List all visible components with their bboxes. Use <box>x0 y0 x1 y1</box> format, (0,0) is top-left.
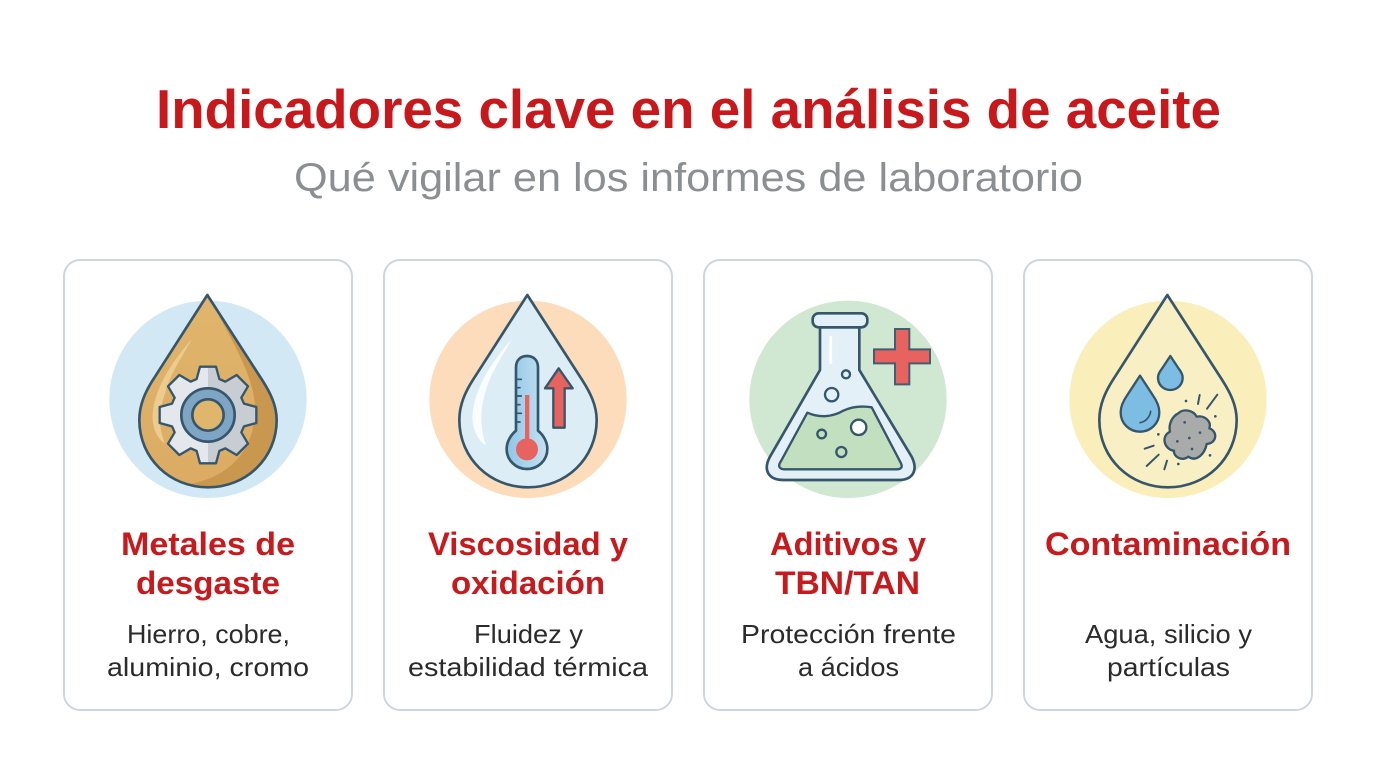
plus sign <box>874 329 930 384</box>
description: partículas <box>1107 652 1230 682</box>
heading: Aditivos y <box>770 526 926 562</box>
description <box>107 619 309 682</box>
heading <box>770 526 926 601</box>
description: Protección frente <box>741 619 956 649</box>
panel: aditivos y TBN/TAN <box>704 260 992 710</box>
description: estabilidad térmica <box>408 652 649 682</box>
heading: Contaminación <box>1045 526 1291 562</box>
description: Hierro, cobre, <box>127 619 290 649</box>
heading: Metales de <box>121 526 295 562</box>
title: Indicadores clave en el análisis de aceite <box>156 78 1221 140</box>
heading: oxidación <box>451 565 605 601</box>
arrow up <box>545 368 573 428</box>
icon: oil drop with gear <box>109 295 307 498</box>
description <box>408 619 649 682</box>
card frame <box>704 260 992 710</box>
heading: desgaste <box>136 565 280 601</box>
description: Fluidez y <box>474 619 583 649</box>
description: aluminio, cromo <box>107 652 309 682</box>
panel: contaminación <box>1024 260 1312 710</box>
description: Agua, silicio y <box>1085 619 1252 649</box>
icon: flask with plus <box>749 301 947 498</box>
panel: viscosidad y oxidación <box>384 260 672 710</box>
card frame <box>384 260 672 710</box>
heading <box>428 526 628 601</box>
icon: drop with thermometer <box>429 295 627 498</box>
subtitle: Qué vigilar en los informes de laboratorio <box>294 156 1083 200</box>
description: a ácidos <box>798 652 899 682</box>
heading: Viscosidad y <box>428 526 628 562</box>
description <box>1085 619 1252 682</box>
panel: metales de desgaste <box>64 260 352 710</box>
icon: drop with water and particles <box>1069 295 1267 498</box>
description <box>741 619 956 682</box>
heading <box>121 526 295 601</box>
card frame <box>1024 260 1312 710</box>
heading: TBN/TAN <box>775 565 920 601</box>
card frame <box>64 260 352 710</box>
